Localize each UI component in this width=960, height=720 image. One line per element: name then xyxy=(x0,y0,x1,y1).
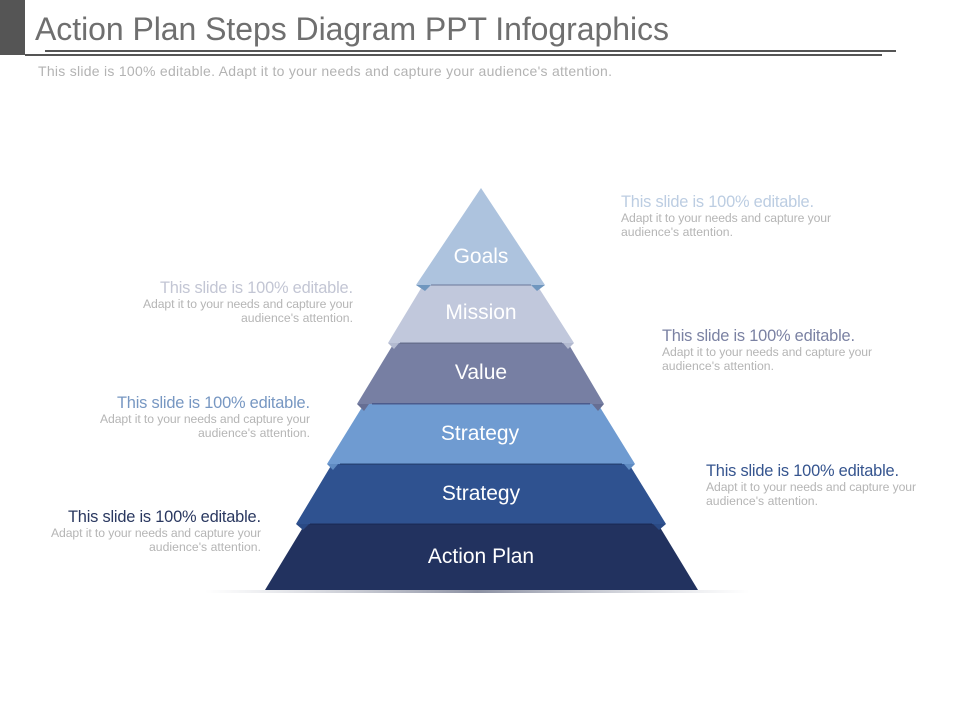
pyramid base shadow xyxy=(205,590,750,593)
header accent block xyxy=(0,0,25,55)
tier: Action Plan: Action Plan xyxy=(428,545,534,568)
callout: Goals xyxy=(621,193,831,239)
callout: Strategy light xyxy=(100,394,310,440)
tier: Strategy dark: Strategy xyxy=(442,482,521,505)
tier: Goals xyxy=(416,188,545,291)
callout: Mission: Adapt it to your needs and capture your xyxy=(143,297,353,311)
callout: Strategy dark: This slide is 100% editable. xyxy=(706,462,899,480)
tier: Goals: Goals xyxy=(454,245,508,268)
tier: Value: Value xyxy=(455,361,507,384)
callout: Value: audience's attention. xyxy=(662,359,774,373)
title rule xyxy=(25,50,896,56)
callout: Value xyxy=(662,327,872,373)
tier: Mission xyxy=(388,285,574,349)
tier: Strategy dark xyxy=(296,464,666,530)
callout: Strategy light: This slide is 100% editable. xyxy=(117,394,310,412)
callout: Mission xyxy=(143,279,353,325)
tier: Value xyxy=(357,343,604,411)
callout: Strategy dark xyxy=(706,462,916,508)
callout: Action Plan: Adapt it to your needs and capture your xyxy=(51,526,261,540)
tier: Action Plan xyxy=(265,524,698,590)
callout: Value: This slide is 100% editable. xyxy=(662,327,855,345)
callout: Action Plan: This slide is 100% editable. xyxy=(68,508,261,526)
callout: Strategy dark: Adapt it to your needs and capture your xyxy=(706,480,916,494)
callout: Strategy light: audience's attention. xyxy=(198,426,310,440)
callout: Strategy light: Adapt it to your needs and capture your xyxy=(100,412,310,426)
callout: Action Plan: audience's attention. xyxy=(149,540,261,554)
callout: Goals: audience's attention. xyxy=(621,225,733,239)
callout: Goals: Adapt it to your needs and capture your xyxy=(621,211,831,225)
tier: Strategy light xyxy=(327,404,635,470)
callout: Action Plan xyxy=(51,508,261,554)
tier: Strategy light: Strategy xyxy=(441,422,520,445)
callout: Mission: audience's attention. xyxy=(241,311,353,325)
pyramid diagram xyxy=(265,188,698,590)
callout: Mission: This slide is 100% editable. xyxy=(160,279,353,297)
subtitle: This slide is 100% editable. Adapt it to your needs and capture your audience's attention. xyxy=(38,63,612,79)
callout: Value: Adapt it to your needs and capture your xyxy=(662,345,872,359)
tier: Mission: Mission xyxy=(445,301,517,324)
callout: Goals: This slide is 100% editable. xyxy=(621,193,814,211)
callout: Strategy dark: audience's attention. xyxy=(706,494,818,508)
title: Action Plan Steps Diagram PPT Infographics xyxy=(35,11,669,47)
